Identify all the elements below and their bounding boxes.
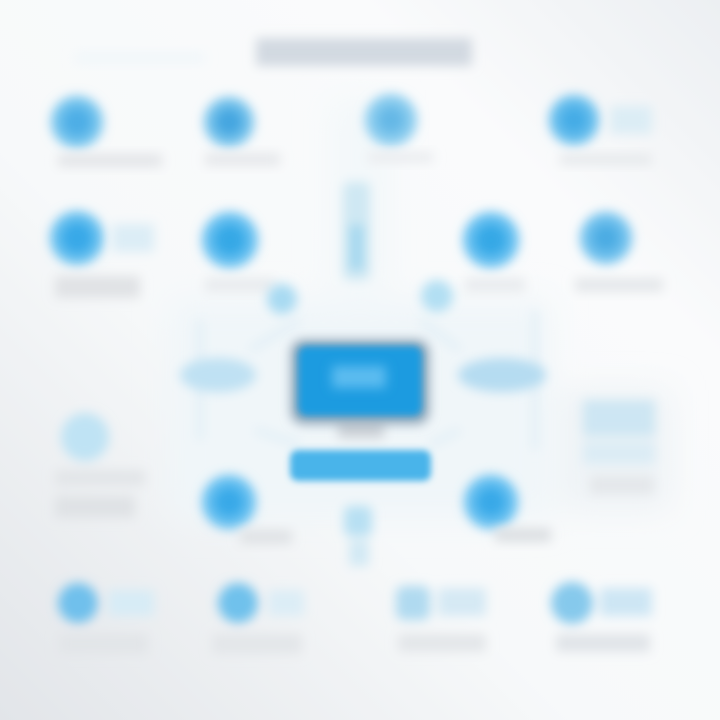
background haze (170, 100, 670, 520)
bottom row (58, 582, 652, 654)
monitor stand (338, 420, 384, 438)
monitor screen (298, 346, 422, 416)
bottom item 1 (58, 583, 154, 654)
central monitor (291, 340, 429, 438)
node 8 (575, 212, 663, 292)
node 1 (51, 96, 162, 167)
monitor text glow (332, 366, 386, 388)
left cloud label (180, 358, 256, 392)
title glow (75, 52, 205, 64)
bottom item 3 (396, 586, 486, 652)
right pale card (583, 400, 655, 494)
title (256, 38, 472, 66)
node 7 (463, 212, 525, 292)
left connector lines (200, 320, 300, 445)
small right connector node (421, 280, 453, 312)
node row 1 (51, 94, 652, 167)
node 4 (549, 95, 652, 165)
centre vertical stack (343, 182, 370, 280)
bottom item 4 (551, 582, 652, 652)
node 5 (50, 211, 154, 298)
node row 2 (50, 211, 663, 298)
lower centre icon (344, 506, 372, 566)
central blue bar (290, 450, 431, 481)
monitor frame (291, 340, 429, 424)
right connector lines (420, 310, 535, 450)
small left connector node (267, 284, 297, 314)
node 6 (202, 212, 275, 292)
lower right node (464, 475, 551, 542)
node 3 (365, 94, 433, 163)
left pale card (55, 413, 145, 518)
bottom item 2 (212, 583, 304, 654)
right cloud label (458, 358, 546, 392)
lower left node (202, 475, 292, 544)
node 2 (204, 97, 280, 166)
